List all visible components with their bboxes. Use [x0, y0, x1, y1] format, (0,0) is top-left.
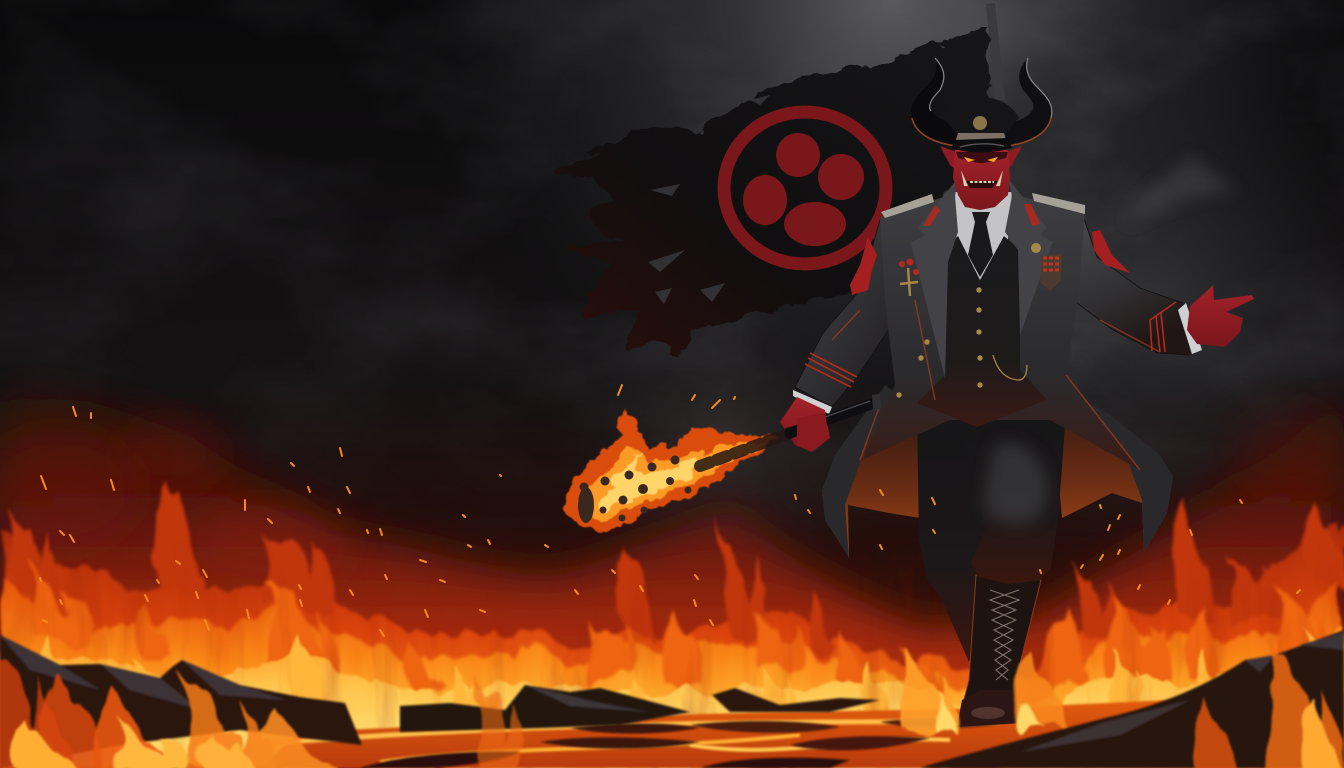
waistcoat: [917, 236, 1047, 427]
left hand gripping club: [780, 397, 830, 452]
rocks: left shore: [0, 635, 880, 768]
right hand: [1187, 285, 1254, 347]
right arm sleeve: [1073, 213, 1190, 355]
club handle: [790, 403, 874, 433]
coat tails: [822, 375, 1173, 558]
left arm sleeve: [795, 220, 907, 407]
club flames outer: [563, 406, 780, 533]
back leg: [917, 410, 985, 662]
shirt cuffs: [793, 303, 1202, 414]
right lapel: [1005, 178, 1053, 335]
shirt: [953, 192, 1012, 285]
right horn: [1005, 58, 1052, 146]
epaulettes: [881, 193, 1085, 218]
trouser highlight: [985, 443, 1047, 524]
ears: [940, 146, 1022, 178]
left lapel: [911, 178, 958, 378]
glowing eyes: [964, 157, 998, 162]
rocks: right shore: [920, 630, 1344, 768]
flames: yellow front layer: [0, 620, 1344, 768]
club shaft: [700, 433, 790, 466]
flames: red back layer: [0, 485, 1344, 768]
smoke clouds: [44, 0, 1344, 386]
club flames core: [596, 452, 705, 512]
club flames inner: [578, 442, 765, 522]
collar tabs: [923, 204, 1040, 226]
flaming spiked club: [563, 394, 881, 533]
flame texture streaks: [7, 578, 1337, 752]
grip fingers over club: [797, 412, 829, 452]
flag emblem: [724, 112, 886, 264]
left horn: [911, 58, 958, 146]
watch chain: [993, 355, 1027, 380]
medals right: [1040, 254, 1062, 291]
front boot: [957, 575, 1041, 727]
lava floor: [250, 692, 1344, 768]
club spikes: [578, 456, 692, 523]
red fire haze: [0, 390, 1344, 768]
torso coat: [862, 195, 1140, 470]
demon officer figure: [780, 58, 1254, 727]
embers and sparks: [40, 385, 1300, 636]
fire wisps over left rocks: [0, 636, 524, 768]
flag pole: [986, 3, 1005, 100]
coat rim light: [832, 300, 1160, 470]
neck and head: [940, 146, 1022, 210]
cuff bands: [805, 302, 1176, 387]
flag cloth: [552, 26, 990, 356]
flag tear holes: [648, 95, 770, 304]
necktie: [968, 212, 993, 277]
brass buttons: [896, 243, 1041, 398]
flames: orange middle layer: [0, 562, 1344, 768]
front leg trousers: [950, 405, 1066, 584]
flames around boot: [904, 648, 1066, 732]
mouth and fangs: [961, 170, 1003, 188]
fire wisps over right rocks: [1188, 642, 1344, 768]
medals left: [899, 258, 919, 296]
coat lining: [822, 385, 1173, 558]
peaked cap: [943, 97, 1019, 152]
brow shadow: [956, 152, 1008, 163]
sleeve patches: [850, 230, 1130, 295]
flag: [552, 3, 1005, 356]
face: [953, 150, 1010, 210]
